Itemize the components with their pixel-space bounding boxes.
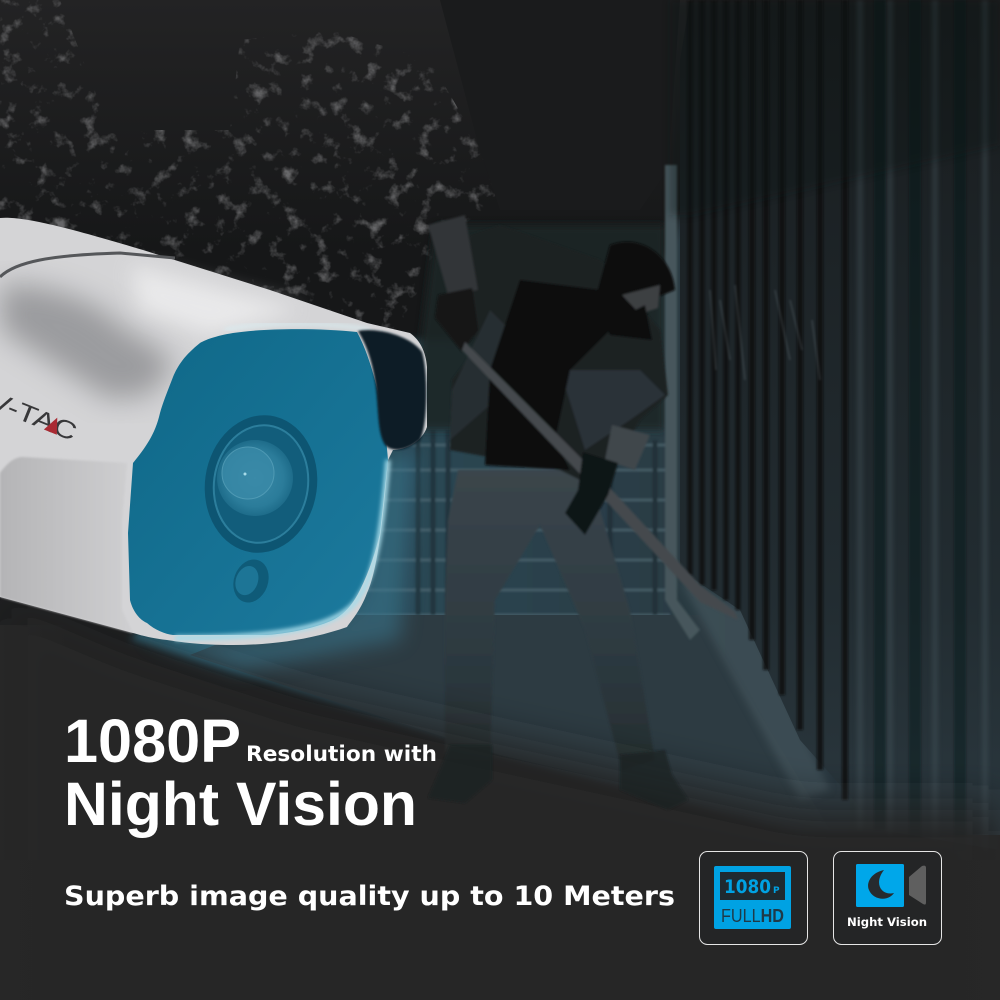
icon: full HD blue plate: 1080: [724, 876, 771, 898]
white pillar: [665, 165, 700, 640]
lower body panel: [0, 457, 133, 633]
badge: night vision: [834, 852, 942, 944]
security fence wall: [670, 0, 1000, 850]
badge: 1080p full HD: [700, 852, 808, 944]
back wall behind burglar: [410, 225, 665, 430]
camera: [0, 218, 427, 670]
lit rim of face: [175, 460, 388, 638]
icon: moon camera: [856, 864, 926, 907]
night vision heading: Night Vision: [64, 770, 417, 838]
glove right: [565, 452, 618, 535]
bottom fade panel: [0, 590, 1000, 1000]
tagline: Superb image quality up to 10 Meters: [64, 881, 675, 912]
building roof: [440, 0, 680, 210]
brand logo: [0, 386, 81, 447]
IR sensor: [228, 555, 274, 607]
title: [64, 707, 437, 838]
logo red triangle: [44, 415, 63, 435]
hood shade: [358, 330, 426, 450]
blue front face: [128, 329, 388, 635]
crowbar: [462, 342, 738, 620]
lens ring: [196, 408, 326, 560]
body shading: [0, 284, 175, 400]
shoes: [428, 745, 688, 810]
burglar: [428, 215, 738, 770]
raised arm: [428, 215, 478, 295]
top seam: [0, 253, 175, 277]
balaclava: [595, 242, 675, 325]
icon: full HD blue plate: [714, 866, 791, 929]
camera body: [0, 218, 427, 645]
jacket: [450, 225, 668, 490]
lens glass: [217, 440, 293, 516]
icon: full HD blue plate: P: [773, 886, 780, 896]
trees: [0, 0, 495, 329]
black shirt: [485, 280, 620, 470]
floor: [190, 615, 830, 830]
subtitle inline: Resolution with: [246, 742, 437, 766]
background night scene: [0, 0, 680, 642]
glove left: [435, 288, 478, 352]
railing: [355, 430, 670, 615]
light beam: [130, 145, 1000, 835]
camera glow: [140, 450, 415, 670]
forearm right: [605, 425, 650, 470]
title: 1080P: [64, 707, 241, 775]
icon: full HD blue plate: FULLHD: [721, 906, 784, 926]
badge label: Night Vision: [847, 915, 927, 929]
legs: [445, 470, 655, 770]
